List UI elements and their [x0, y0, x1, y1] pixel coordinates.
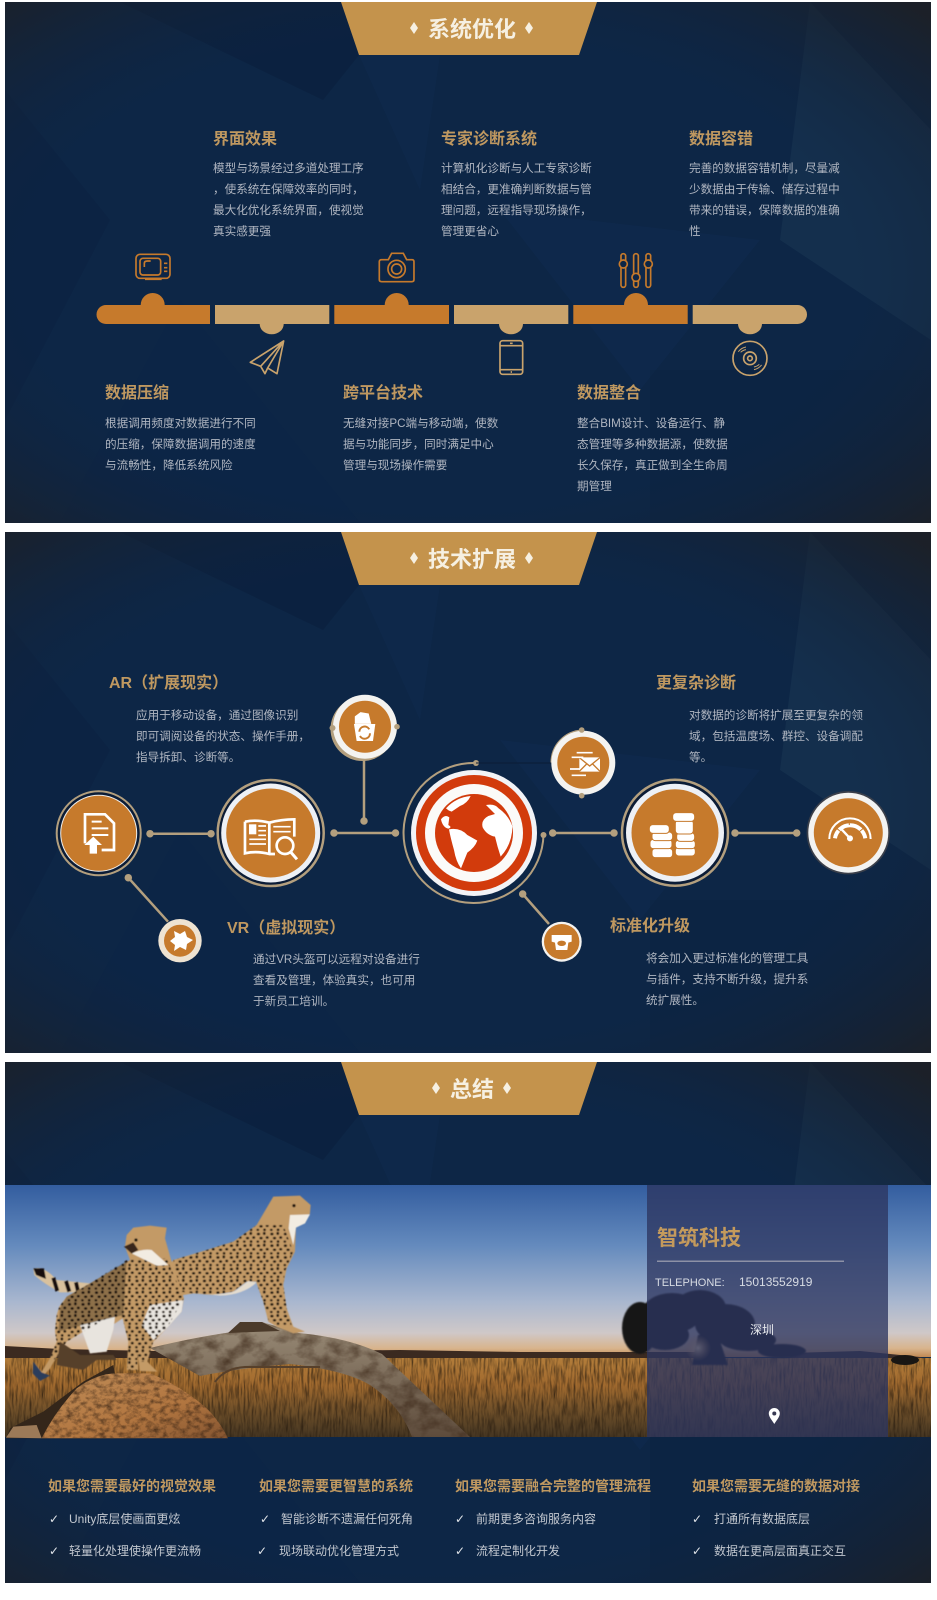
connector lines — [126, 758, 799, 924]
text block: AR: AR（扩展现实） — [109, 673, 228, 692]
text block: 标准化升级: 将会加入更过标准化的管理工具 — [646, 951, 809, 965]
text block: 数据容错: 性 — [689, 224, 701, 238]
text block: 更复杂诊断: 对数据的诊断将扩展至更复杂的领 — [689, 708, 863, 722]
column: smart system: 如果您需要更智慧的系统 — [259, 1478, 413, 1494]
column: visual effect: 轻量化处理使操作更流畅 — [69, 1543, 201, 1558]
column: visual effect — [48, 1478, 216, 1558]
text block: VR: 查看及管理，体验真实，也可用 — [253, 973, 415, 987]
column: data connection: ✓ — [692, 1544, 702, 1558]
column: visual effect: 如果您需要最好的视觉效果 — [48, 1478, 216, 1494]
text block: 更复杂诊断: 等。 — [689, 750, 712, 764]
text block: 专家诊断系统: 相结合，更准确判断数据与管 — [441, 182, 592, 196]
column: visual effect: ✓ — [49, 1544, 59, 1558]
text block: 更复杂诊断: 域，包括温度场、群控、设备调配 — [689, 729, 863, 743]
icon node: telephone — [542, 922, 582, 962]
icon: map pin — [769, 1408, 780, 1424]
text block: 更复杂诊断 — [656, 673, 863, 764]
panel: technology expansion — [5, 532, 931, 1053]
text block: 界面效果: ，使系统在保障效率的同时， — [213, 182, 364, 196]
panel: system optimization — [5, 2, 931, 523]
contact panel — [647, 1185, 888, 1437]
text block: 数据容错 — [689, 129, 840, 238]
icon node: book search — [218, 780, 324, 886]
text block: 数据整合: 整合BIM设计、设备运行、静 — [577, 416, 726, 430]
banner: 总结 — [341, 1062, 597, 1115]
column: smart system — [257, 1478, 413, 1558]
text block: 标准化升级 — [610, 916, 809, 1007]
icon node: envelope — [476, 727, 615, 798]
column: smart system: ✓ — [257, 1544, 267, 1558]
text block: 数据容错: 带来的错误，保障数据的准确 — [689, 203, 840, 217]
text block: 界面效果 — [213, 129, 364, 238]
text block: AR — [109, 673, 310, 764]
text block: 标准化升级: 标准化升级 — [610, 916, 690, 935]
text block: AR: 即可调阅设备的状态、操作手册， — [136, 729, 310, 743]
icon node: recycle bin — [330, 695, 400, 761]
photo: cheetahs on savanna — [5, 1185, 931, 1438]
icon node: gauge — [807, 791, 890, 874]
icon node: document upload — [57, 791, 141, 875]
telephone: TELEPHONE: — [655, 1277, 725, 1289]
column: data connection: 打通所有数据底层 — [714, 1511, 810, 1526]
text block: 界面效果: 模型与场景经过多道处理工序 — [213, 161, 364, 175]
column: data connection: ✓ — [692, 1512, 702, 1526]
icon node: globe — [404, 760, 546, 903]
text block: 专家诊断系统 — [441, 129, 592, 238]
text block: 数据压缩: 的压缩，保障数据调用的速度 — [105, 437, 256, 451]
text block: 跨平台技术: 无缝对接PC端与移动端，使数 — [343, 416, 499, 430]
banner: 技术扩展 — [341, 532, 597, 585]
column: visual effect: Unity底层使画面更炫 — [69, 1511, 180, 1526]
text block: 数据容错: 完善的数据容错机制，尽量减 — [689, 161, 840, 175]
text block: 跨平台技术: 管理与现场操作需要 — [343, 458, 447, 472]
icon node: coins — [622, 780, 728, 886]
city: 深圳 — [750, 1323, 774, 1337]
text block: VR: 通过VR头盔可以远程对设备进行 — [253, 952, 420, 966]
column: visual effect: ✓ — [49, 1512, 59, 1526]
text block: VR: 于新员工培训。 — [253, 994, 334, 1008]
column: smart system: ✓ — [260, 1512, 270, 1526]
company name: 智筑科技 — [657, 1226, 741, 1250]
icon: paper plane — [250, 341, 284, 374]
text block: 数据容错: 数据容错 — [689, 129, 753, 148]
text block: 界面效果: 真实感更强 — [213, 224, 271, 238]
text block: 数据压缩: 根据调用频度对数据进行不同 — [105, 416, 256, 430]
text block: 跨平台技术 — [343, 383, 499, 472]
text block: 数据整合: 期管理 — [577, 479, 612, 493]
text block: VR: VR（虚拟现实） — [227, 918, 345, 937]
banner: 技术扩展: 技术扩展 — [428, 547, 516, 572]
banner: 系统优化: 系统优化 — [428, 17, 516, 42]
text block: 数据整合: 态管理等多种数据源，使数据 — [577, 437, 728, 451]
icon node: puzzle — [158, 919, 202, 962]
column: data connection — [692, 1478, 860, 1558]
text block: 跨平台技术: 跨平台技术 — [343, 383, 423, 402]
column: management process: 如果您需要融合完整的管理流程 — [455, 1478, 651, 1494]
text block: 跨平台技术: 据与功能同步，同时满足中心 — [343, 437, 494, 451]
panel: summary — [5, 1062, 931, 1583]
text block: 数据压缩: 与流畅性，降低系统风险 — [105, 458, 233, 472]
icon: camera — [379, 253, 414, 282]
icon: disc — [733, 341, 767, 375]
column: data connection: 如果您需要无缝的数据对接 — [692, 1478, 860, 1494]
icon: sliders — [619, 254, 652, 287]
tree silhouette — [622, 1290, 806, 1365]
text block: 数据压缩 — [105, 383, 256, 472]
column: data connection: 数据在更高层面真正交互 — [714, 1543, 846, 1558]
column: smart system: 现场联动优化管理方式 — [279, 1543, 399, 1558]
text block: 标准化升级: 统扩展性。 — [646, 993, 704, 1007]
column: management process: 流程定制化开发 — [476, 1543, 560, 1558]
telephone: 15013552919 — [739, 1275, 813, 1289]
text block: AR: 指导拆卸、诊断等。 — [136, 750, 240, 764]
telephone — [655, 1275, 813, 1289]
text block: AR: 应用于移动设备，通过图像识别 — [136, 708, 298, 722]
text block: 数据整合: 数据整合 — [577, 383, 641, 402]
text block: 数据容错: 少数据由于传输、储存过程中 — [689, 182, 840, 196]
text block: 更复杂诊断: 更复杂诊断 — [656, 673, 736, 692]
column: management process: ✓ — [455, 1544, 465, 1558]
column: management process: 前期更多咨询服务内容 — [476, 1511, 596, 1526]
text block: 数据整合 — [577, 383, 728, 493]
text block: 专家诊断系统: 专家诊断系统 — [441, 129, 537, 148]
text block: 数据整合: 长久保存，真正做到全生命周 — [577, 458, 728, 472]
log — [150, 1322, 470, 1437]
cheetah and rock drawing — [6, 1196, 311, 1438]
column: smart system: 智能诊断不遗漏任何死角 — [281, 1511, 413, 1526]
timeline bar — [96, 293, 807, 334]
text block: 专家诊断系统: 理问题，远程指导现场操作， — [441, 203, 592, 217]
column: management process — [455, 1478, 651, 1558]
text block: 专家诊断系统: 计算机化诊断与人工专家诊断 — [441, 161, 592, 175]
text block: 专家诊断系统: 管理更省心 — [441, 224, 499, 238]
banner: 系统优化 — [341, 2, 597, 55]
icon: television — [136, 254, 170, 279]
text block: VR — [227, 918, 420, 1008]
text block: 界面效果: 界面效果 — [213, 129, 277, 148]
icon: smartphone — [500, 341, 523, 374]
text block: 界面效果: 最大化优化系统界面，使视觉 — [213, 203, 364, 217]
column: management process: ✓ — [455, 1512, 465, 1526]
text block: 标准化升级: 与插件，支持不断升级，提升系 — [646, 972, 808, 986]
text block: 数据压缩: 数据压缩 — [105, 383, 169, 402]
banner: 总结: 总结 — [450, 1077, 494, 1102]
